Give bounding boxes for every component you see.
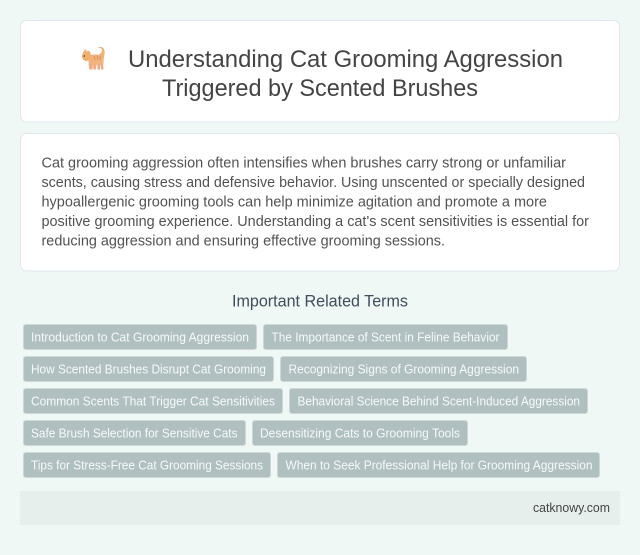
- tag: [24, 324, 256, 350]
- tag: Common Scents That Trigger Cat Sensitivities: [31, 394, 275, 408]
- title: Understanding Cat Grooming Aggression: [128, 46, 563, 73]
- tag: Desensitizing Cats to Grooming Tools: [260, 426, 460, 440]
- tag: [24, 388, 282, 414]
- tag: [290, 388, 588, 414]
- tag: [24, 420, 246, 446]
- footer bar: [20, 491, 620, 525]
- tag: Behavioral Science Behind Scent-Induced Aggression: [298, 394, 580, 408]
- tag: [24, 356, 274, 382]
- footer source text: catknowy.com: [533, 500, 610, 515]
- icon: orange cat: [82, 47, 105, 70]
- title: Triggered by Scented Brushes: [162, 75, 478, 102]
- tag: The Importance of Scent in Feline Behavior: [272, 330, 500, 344]
- summary paragraph: Cat grooming aggression often intensifies when brushes carry strong or unfamiliar: [42, 156, 566, 172]
- panel: related term tags: [24, 324, 600, 478]
- tag: [264, 324, 508, 350]
- tag: [24, 452, 270, 478]
- summary paragraph: reducing aggression and ensuring effective grooming sessions.: [42, 234, 445, 250]
- summary paragraph: hypoallergenic grooming tools can help minimize agitation and promote a more: [42, 194, 547, 210]
- tag: When to Seek Professional Help for Grooming Aggression: [286, 458, 593, 472]
- summary paragraph: [42, 156, 589, 250]
- heading: related terms: Important Related Terms: [232, 292, 408, 310]
- tag: Tips for Stress-Free Cat Grooming Sessions: [31, 458, 263, 472]
- summary paragraph: scents, causing stress and defensive behavior. Using unscented or specially designed: [42, 175, 585, 191]
- panel: title card: [20, 20, 620, 122]
- tag: Introduction to Cat Grooming Aggression: [31, 330, 249, 344]
- tag: [280, 356, 526, 382]
- summary paragraph: positive grooming experience. Understanding a cat's scent sensitivities is essential for: [42, 214, 589, 230]
- tag: [252, 420, 468, 446]
- title: [128, 46, 563, 102]
- tag: [278, 452, 600, 478]
- tag: How Scented Brushes Disrupt Cat Grooming: [31, 362, 266, 376]
- tag: Recognizing Signs of Grooming Aggression: [288, 362, 519, 376]
- tag: Safe Brush Selection for Sensitive Cats: [31, 426, 238, 440]
- panel: summary card: [20, 134, 620, 271]
